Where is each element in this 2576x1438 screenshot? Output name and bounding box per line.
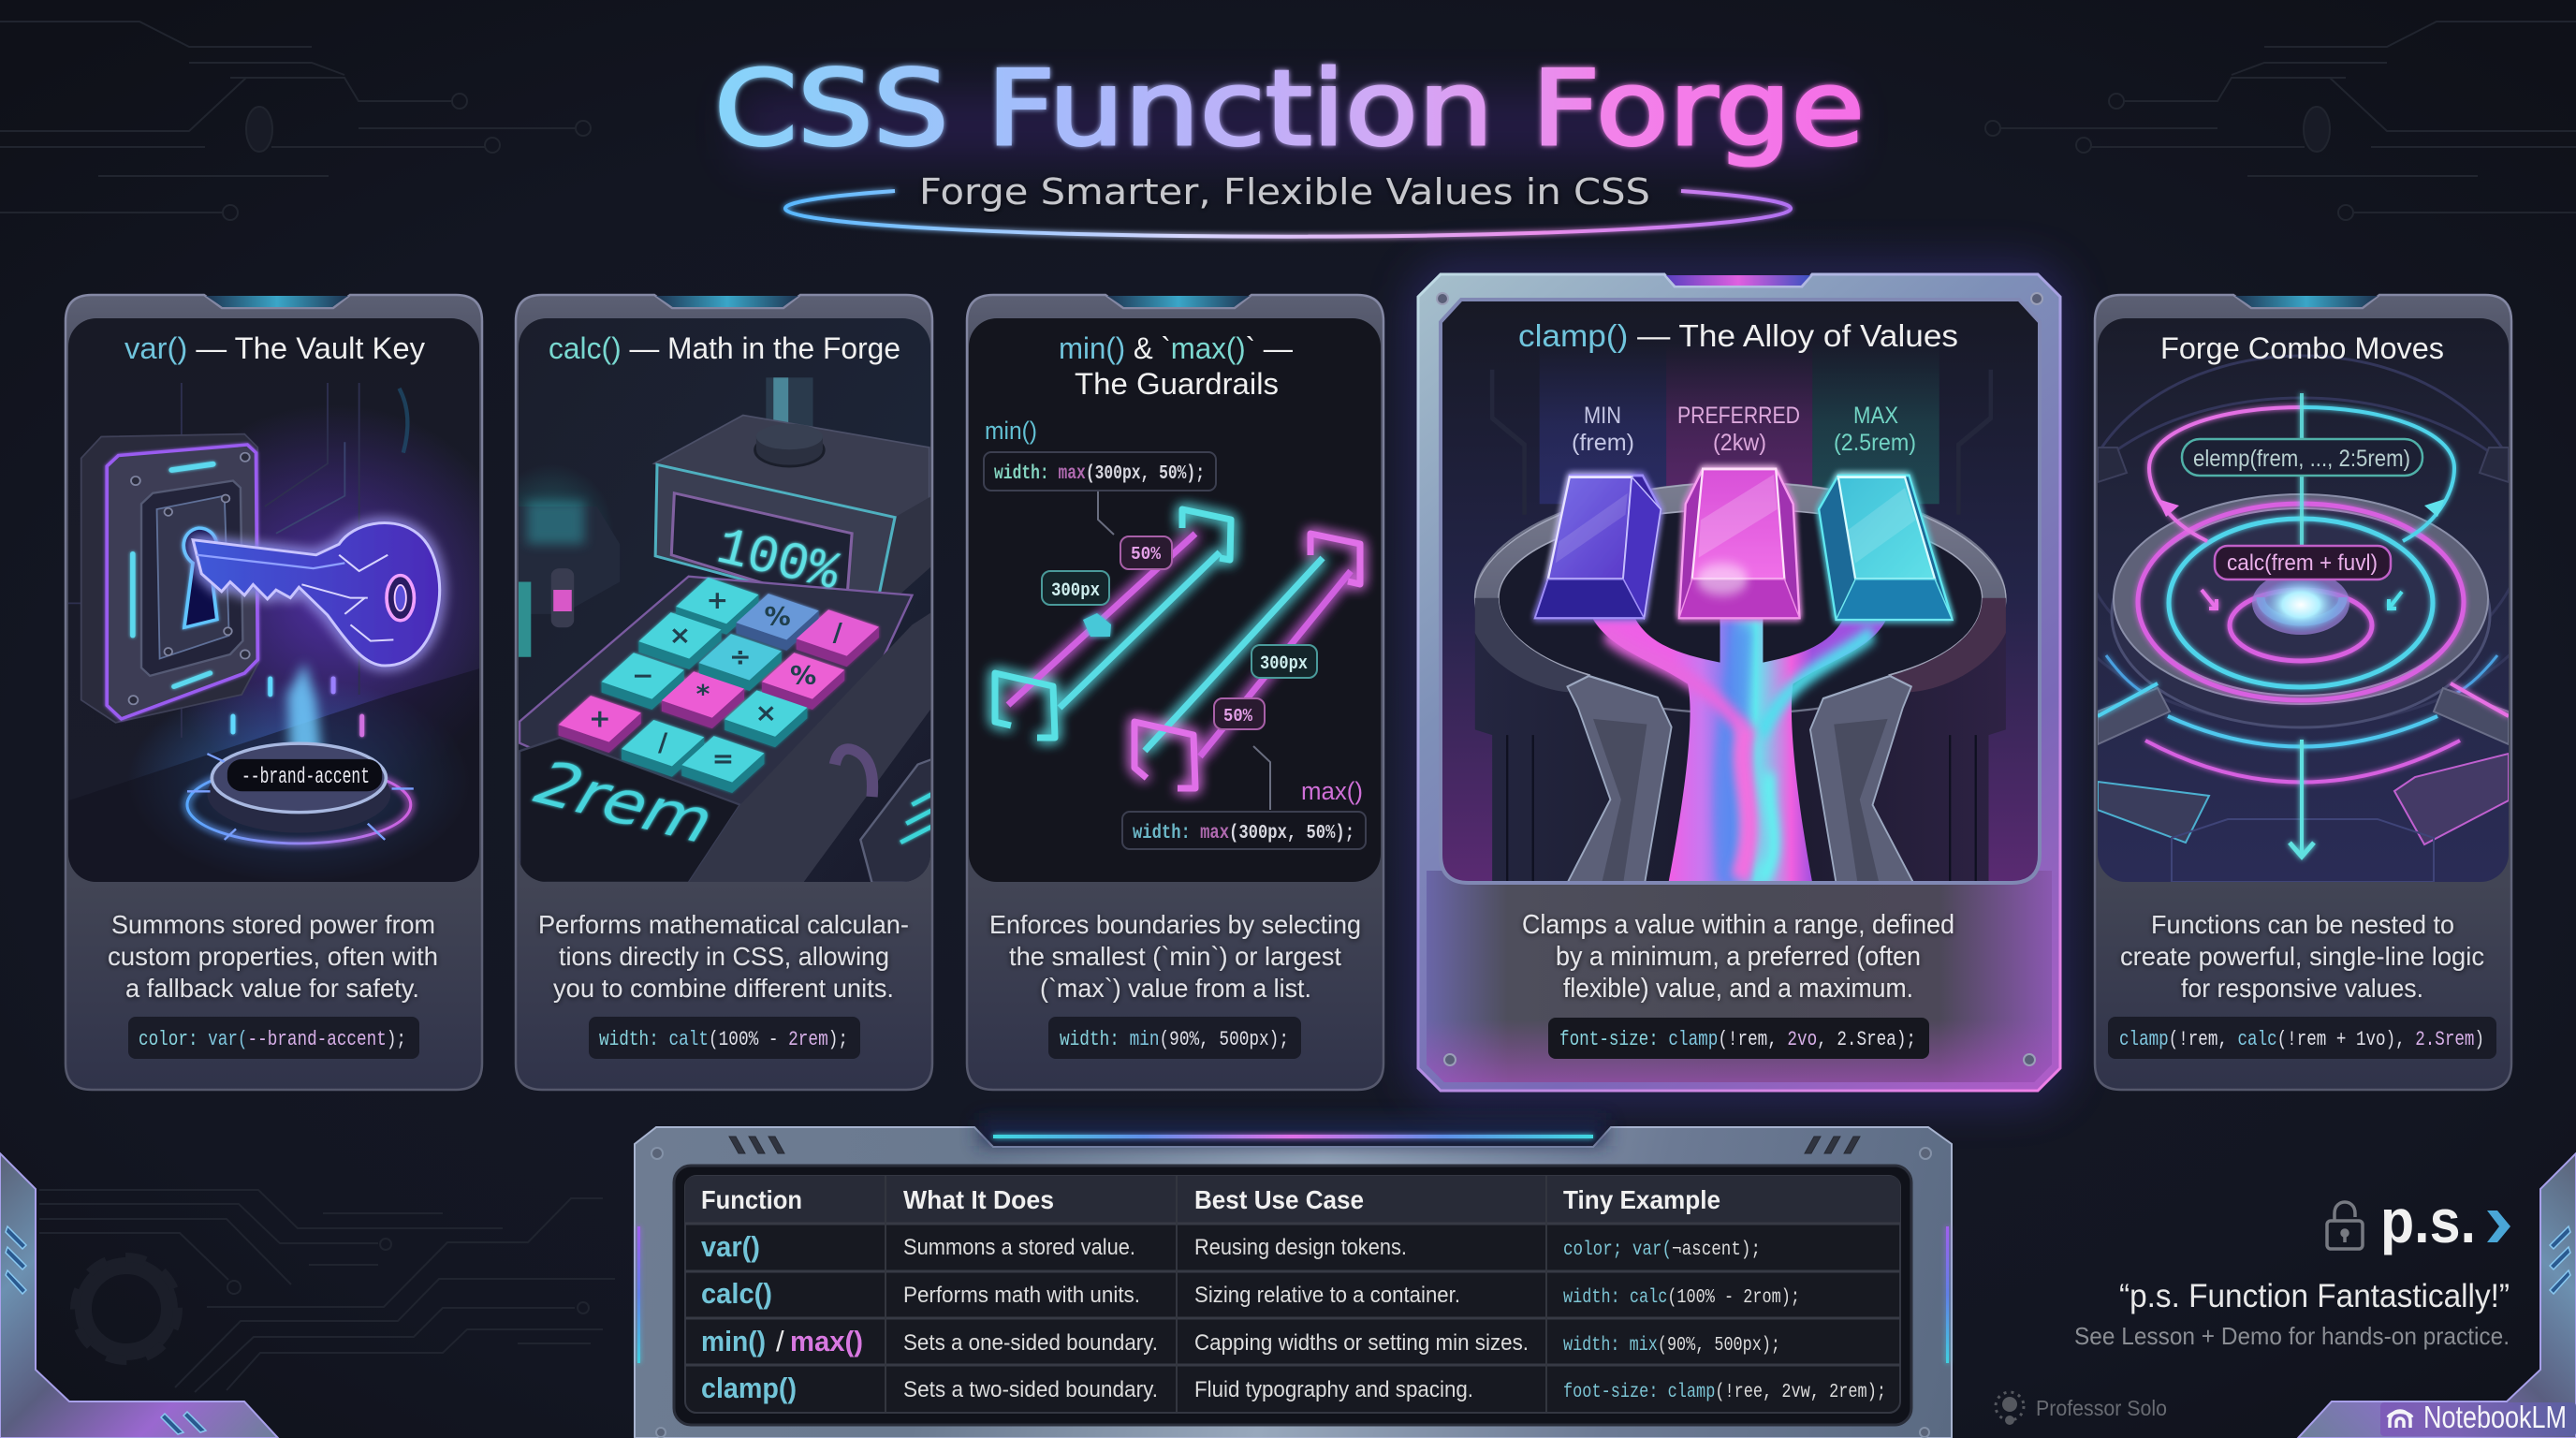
tag: 50%: 50% <box>1223 706 1253 726</box>
display: 100%: 100% <box>710 519 845 604</box>
code box: min <box>984 452 1216 491</box>
key glyphs: % <box>790 662 816 690</box>
icon: open lock <box>2327 1202 2363 1249</box>
icon: notebook arcs <box>2388 1411 2412 1428</box>
rails: min <box>995 509 1231 738</box>
description <box>989 910 1361 1003</box>
core glow <box>2260 577 2342 633</box>
description: you to combine different units. <box>553 974 894 1003</box>
display: 2rem: 2rem <box>520 749 729 856</box>
code example <box>1548 1018 1929 1059</box>
description: Enforces boundaries by selecting <box>989 910 1361 939</box>
description: by a minimum, a preferred (often <box>1556 942 1921 972</box>
labels: min preferred max <box>1572 403 1916 456</box>
vault plate <box>81 434 259 723</box>
table header: Tiny Example <box>1563 1185 1720 1214</box>
icon: faint gear <box>75 1257 178 1360</box>
key glyphs: + <box>589 705 611 733</box>
table frame <box>635 1127 1952 1438</box>
table column: best use case: Fluid typography and spacing. <box>1194 1377 1473 1402</box>
molten flow <box>1588 611 1890 883</box>
title: CSS Function Forge <box>714 49 1865 169</box>
footer: professor solo: Professor Solo <box>2036 1396 2167 1420</box>
table column: function: calc() <box>701 1277 772 1310</box>
heading: min() & `max()` — <box>1059 331 1293 365</box>
key glyphs <box>589 587 842 773</box>
table column: function: max() <box>790 1325 863 1357</box>
slab <box>520 577 912 813</box>
card frame <box>967 295 1383 1090</box>
description: for responsive values. <box>2181 974 2423 1003</box>
key glyphs: × <box>755 699 777 727</box>
description <box>2120 910 2484 1003</box>
table header: Function <box>701 1185 802 1214</box>
key glyphs: % <box>764 603 791 631</box>
card frame <box>1418 274 2060 1091</box>
table column: best use case <box>1194 1235 1529 1402</box>
table column: what it does: Sets a one-sided boundary. <box>903 1330 1158 1356</box>
table column: tiny example <box>1563 1240 1886 1403</box>
code example: clamp(!rem, calc(!rem + 1vo), 2.Srem) <box>2119 1028 2484 1051</box>
table header: Best Use Case <box>1194 1185 1364 1214</box>
table column: tiny example: foot-size: clamp(!ree, 2vw, 2rem); <box>1563 1382 1886 1403</box>
card frame <box>516 295 932 1090</box>
keys <box>559 578 879 793</box>
subtitle with ring <box>785 171 1791 237</box>
label: max(): max() <box>1301 777 1363 805</box>
heading <box>1059 331 1293 401</box>
background circuit lines: top right <box>1985 22 2576 220</box>
table column: tiny example: width: calc(100% - 2rom); <box>1563 1287 1800 1309</box>
description: Performs mathematical calculan- <box>538 910 909 939</box>
heading: clamp() — The Alloy of Values <box>1518 318 1958 353</box>
key glyphs: − <box>632 662 653 690</box>
table column: function: min() <box>701 1325 766 1357</box>
labels: min preferred max: (2kw) <box>1713 430 1766 456</box>
ingot: max <box>1819 476 1952 620</box>
description: tions directly in CSS, allowing <box>559 942 889 971</box>
code example <box>2108 1017 2496 1059</box>
icon: bulb <box>1996 1392 2024 1425</box>
description <box>538 910 909 1003</box>
tag: 300px: 300px <box>1051 580 1100 602</box>
label: --brand-accent: --brand-accent <box>242 765 370 790</box>
table grid <box>685 1176 1900 1413</box>
illustration: nested rings <box>2049 318 2554 882</box>
inner screen <box>674 1166 1911 1425</box>
small arrows <box>2202 590 2402 609</box>
table column: tiny example: width: mix(90%, 500px); <box>1563 1335 1780 1357</box>
neon strip: right <box>1946 1226 1949 1363</box>
key glyphs: + <box>706 587 728 615</box>
footer: tagline: “p.s. Function Fantastically!” <box>2119 1278 2510 1314</box>
rivets <box>651 1148 1931 1437</box>
outer lower arcs <box>2106 655 2497 783</box>
key glyphs: * <box>696 681 710 709</box>
code box: min: width: max(300px, 50%); <box>994 463 1205 485</box>
table column: tiny example: color; var(¬ascent); <box>1563 1240 1761 1261</box>
crucible walls <box>1475 595 2006 883</box>
connectors <box>1098 491 1270 810</box>
heading: The Guardrails <box>1075 367 1279 401</box>
panel: var() card <box>64 295 528 1090</box>
tag: 300px: 300px <box>1260 653 1308 675</box>
heading: var() — The Vault Key <box>124 331 425 365</box>
side conduits <box>2098 683 2509 882</box>
panel: clamp() card <box>1418 274 2060 1091</box>
metal ring <box>2112 503 2490 727</box>
heading: Forge Combo Moves <box>2160 331 2444 365</box>
labels: min preferred max: (frem) <box>1572 430 1634 456</box>
background circuit lines: bottom left <box>39 1190 615 1392</box>
footer: note: See Lesson + Demo for hands-on practice. <box>2074 1322 2510 1350</box>
footer: professor solo <box>1996 1392 2167 1425</box>
panel: summary table <box>635 1120 1952 1438</box>
illustration: alloy crucible <box>1441 300 2040 883</box>
neon rings <box>2138 504 2464 700</box>
description <box>1522 910 1954 1004</box>
description: the smallest (`min`) or largest <box>1009 942 1341 971</box>
top loop arrows <box>2149 407 2454 541</box>
table column: function: clamp() <box>701 1372 797 1404</box>
side device <box>860 759 932 883</box>
corner frame: bottom right <box>2298 1153 2576 1438</box>
table column: best use case: Reusing design tokens. <box>1194 1235 1407 1260</box>
code box: max: width: max(300px, 50%); <box>1133 823 1354 844</box>
machine background <box>517 506 620 614</box>
metal channels <box>1567 676 1672 883</box>
labels: min preferred max: MAX <box>1853 403 1898 429</box>
table column: best use case: Capping widths or setting min sizes. <box>1194 1330 1529 1356</box>
pill: calc <box>2215 546 2391 580</box>
description: custom properties, often with <box>108 942 438 971</box>
heading: calc() — Math in the Forge <box>549 331 900 365</box>
card frame <box>66 295 482 1090</box>
slots <box>729 1137 1860 1153</box>
tag: 50% <box>1214 698 1265 729</box>
illustration: calculator <box>519 318 930 882</box>
code example: font-size: clamp(!rem, 2vo, 2.Srea); <box>1559 1028 1916 1051</box>
background circuit lines: top left <box>0 22 591 220</box>
card frame <box>2095 295 2511 1090</box>
corner frame: bottom left <box>0 1153 278 1438</box>
neon strip: top <box>979 1120 1606 1146</box>
panel: min() and max() card <box>967 295 1383 1090</box>
lower body <box>1427 871 2052 1082</box>
description: Clamps a value within a range, defined <box>1522 910 1954 940</box>
pill: clamp: elemp(frem, ..., 2:5rem) <box>2193 446 2410 472</box>
glow behind clamp card <box>1427 281 2051 1086</box>
illustration: vault key <box>68 318 479 882</box>
table column: what it does: Sets a two-sided boundary. <box>903 1377 1158 1402</box>
code example <box>128 1017 419 1059</box>
table header: What It Does <box>903 1185 1054 1214</box>
key glyphs: ÷ <box>729 643 752 671</box>
description <box>108 910 438 1003</box>
press column <box>766 377 812 427</box>
code example: width: calt(100% - 2rem); <box>599 1028 848 1051</box>
table column: what it does: Summons a stored value. <box>903 1235 1135 1260</box>
tag: 50%: 50% <box>1131 544 1162 565</box>
rails: max <box>1134 534 1360 788</box>
footer: p.s. logo: p.s. <box>2380 1186 2476 1255</box>
table column: best use case: Sizing relative to a container. <box>1194 1283 1460 1308</box>
table column: what it does <box>903 1235 1158 1402</box>
pill: clamp <box>2182 439 2422 476</box>
description: a fallback value for safety. <box>125 974 419 1003</box>
tag: 300px <box>1251 645 1317 678</box>
code example <box>589 1017 860 1059</box>
description: (`max`) value from a list. <box>1040 974 1311 1003</box>
labels: min preferred max: (2.5rem) <box>1834 430 1916 456</box>
tag: 50% <box>1120 536 1172 569</box>
table column: function <box>701 1230 863 1404</box>
table column: what it does: Performs math with units. <box>903 1283 1140 1308</box>
icon: chevron <box>2487 1211 2510 1242</box>
labels: min preferred max: PREFERRED <box>1677 403 1800 429</box>
central beam and arrow <box>2290 393 2314 857</box>
code example: width: min(90%, 500px); <box>1060 1028 1289 1051</box>
panel: combo moves card <box>2049 295 2554 1090</box>
illustration: guardrails <box>969 318 1381 882</box>
key glyphs: / <box>658 729 667 757</box>
description: flexible) value, and a maximum. <box>1563 974 1913 1004</box>
code box: max <box>1122 812 1366 849</box>
description: create powerful, single-line logic <box>2120 942 2484 971</box>
description: Functions can be nested to <box>2151 910 2454 939</box>
label: min(): min() <box>985 417 1037 445</box>
table column: function: / <box>776 1325 784 1357</box>
pill: calc: calc(frem + fuvl) <box>2227 550 2378 576</box>
ingot: min <box>1535 476 1661 618</box>
footer: p.s. logo <box>2327 1186 2510 1255</box>
key <box>193 523 440 666</box>
image border <box>1441 300 2040 883</box>
table header <box>701 1185 1720 1214</box>
key glyphs: × <box>669 622 691 650</box>
subtitle with ring: Forge Smarter, Flexible Values in CSS <box>919 171 1650 213</box>
description: Summons stored power from <box>111 910 435 939</box>
tag: 300px <box>1042 571 1109 605</box>
code example <box>1048 1017 1301 1059</box>
crucible ring <box>1475 482 2005 713</box>
neon strip: left <box>637 1226 640 1363</box>
rivets <box>1437 293 2042 1065</box>
key glyphs: = <box>712 745 734 773</box>
table column: function: var() <box>701 1230 760 1263</box>
ingot: preferred <box>1679 469 1799 618</box>
panel: calc() card <box>488 295 945 1090</box>
code example: color: var(--brand-accent); <box>139 1028 406 1051</box>
pedestal <box>187 663 414 844</box>
labels: min preferred max: MIN <box>1584 403 1621 429</box>
key glyphs: / <box>833 619 842 647</box>
